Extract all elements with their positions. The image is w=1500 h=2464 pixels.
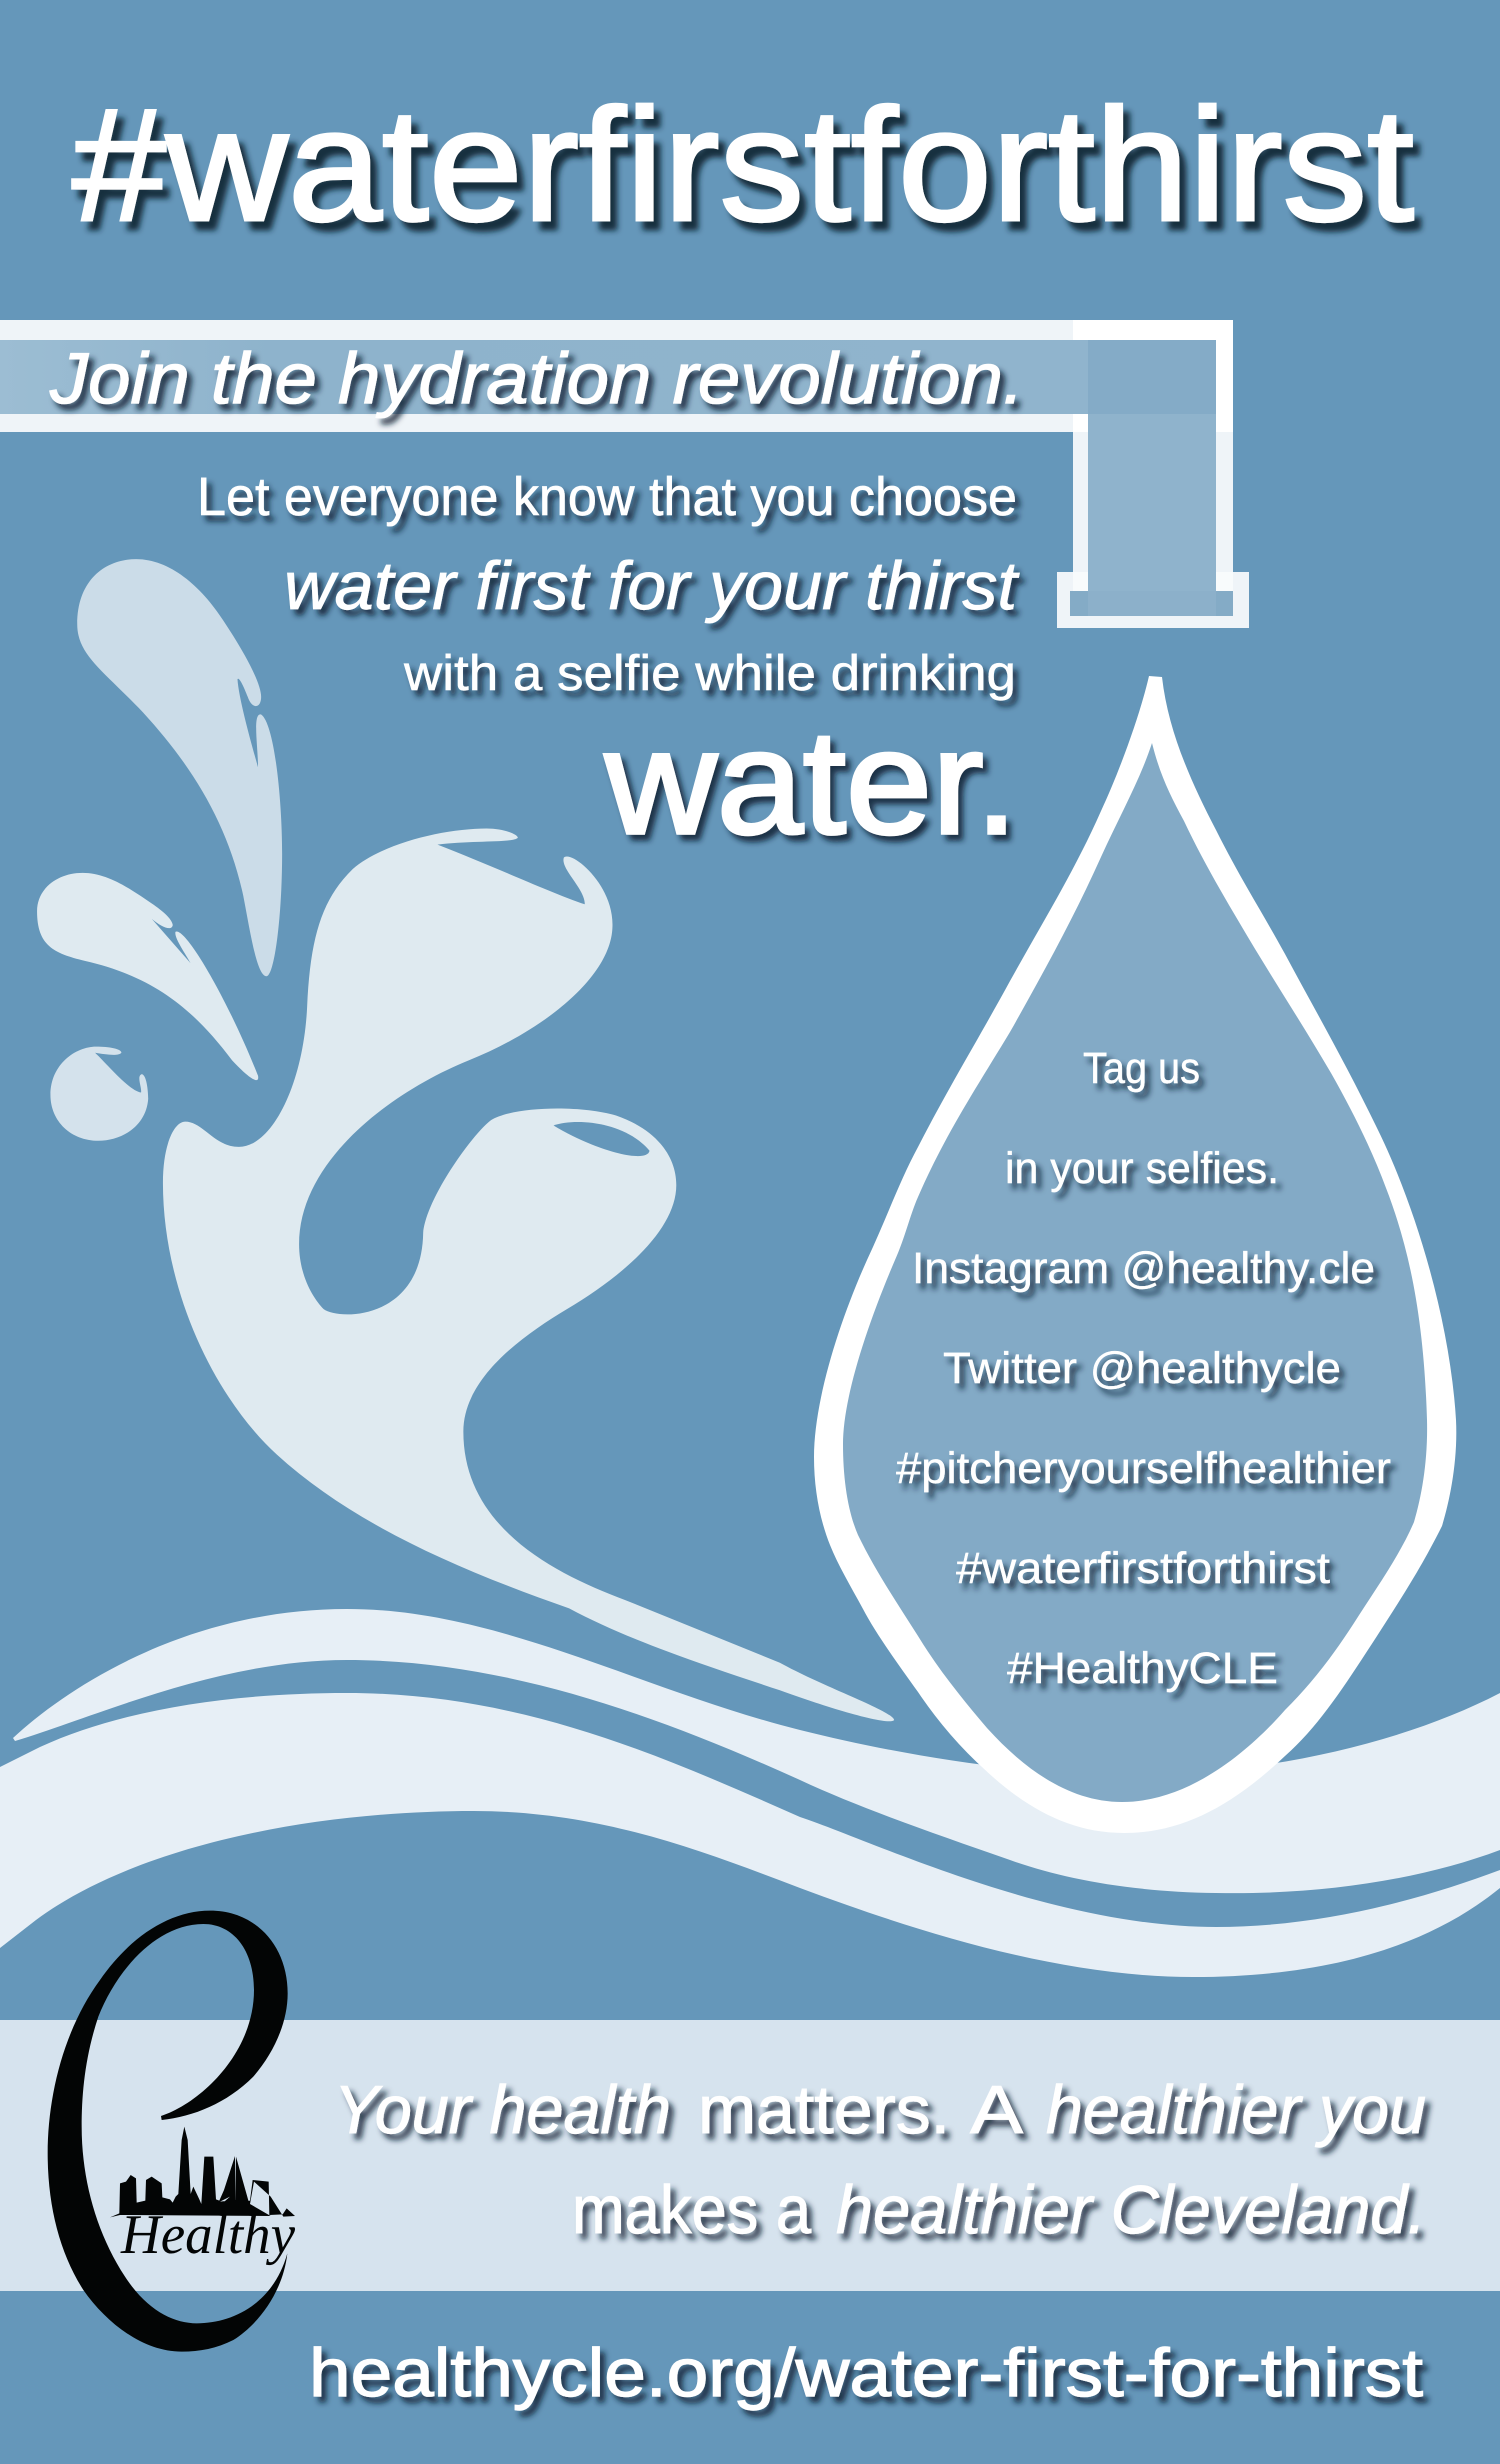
slogan: makes a — [572, 2172, 811, 2248]
drop fill — [843, 743, 1427, 1802]
logo word: Healthy — [120, 2204, 295, 2266]
slogan: Your health — [334, 2072, 671, 2148]
text block: let everyone know: Let everyone know that you choose — [197, 467, 1017, 527]
splash droplet: middle — [37, 873, 258, 1080]
drop text: tag us: Tag us — [1083, 1044, 1200, 1093]
wave: upper crescent — [13, 1609, 1500, 1893]
logo script C — [48, 1911, 288, 2352]
faucet pipe — [0, 320, 1249, 628]
text block: let everyone know — [197, 467, 1020, 865]
slogan: healthier Cleveland. — [836, 2172, 1426, 2248]
splash droplet: small — [50, 1047, 148, 1141]
splash hollow — [554, 1122, 650, 1156]
heading: join the hydration revolution: Join the hydration revolution. — [49, 339, 1024, 419]
drop text: tag us: #waterfirstforthirst — [956, 1544, 1330, 1593]
drop text: tag us: #pitcheryourselfhealthier — [896, 1444, 1391, 1493]
slogan: A — [970, 2072, 1024, 2148]
text block: let everyone know: water. — [604, 700, 1018, 865]
water splash illustration — [37, 559, 894, 1721]
website url: healthycle.org/water-first-for-thirst — [309, 2335, 1423, 2411]
title: #waterfirstforthirst — [72, 75, 1414, 254]
waves — [0, 1609, 1500, 1977]
drop text: tag us — [896, 1044, 1391, 1693]
wave: lower band — [0, 1693, 1500, 1977]
text block: let everyone know: with a selfie while drinking — [403, 645, 1016, 701]
drop text: tag us: #HealthyCLE — [1007, 1644, 1278, 1693]
main splash body — [163, 829, 894, 1721]
text block: let everyone know: water first for your thirst — [284, 548, 1020, 624]
drop outline — [814, 676, 1456, 1833]
logo skyline — [110, 2127, 295, 2217]
splash droplet: upper — [77, 559, 282, 976]
footer band — [0, 2020, 1500, 2291]
slogan — [334, 2072, 1426, 2248]
logo: Healthy C — [48, 1911, 295, 2352]
water drop panel — [814, 676, 1456, 1833]
drop text: tag us: Instagram @healthy.cle — [912, 1244, 1375, 1293]
drop text: tag us: Twitter @healthycle — [943, 1344, 1341, 1393]
slogan: matters. — [698, 2072, 950, 2148]
drop text: tag us: in your selfies. — [1005, 1144, 1279, 1193]
slogan: healthier you — [1046, 2072, 1426, 2148]
